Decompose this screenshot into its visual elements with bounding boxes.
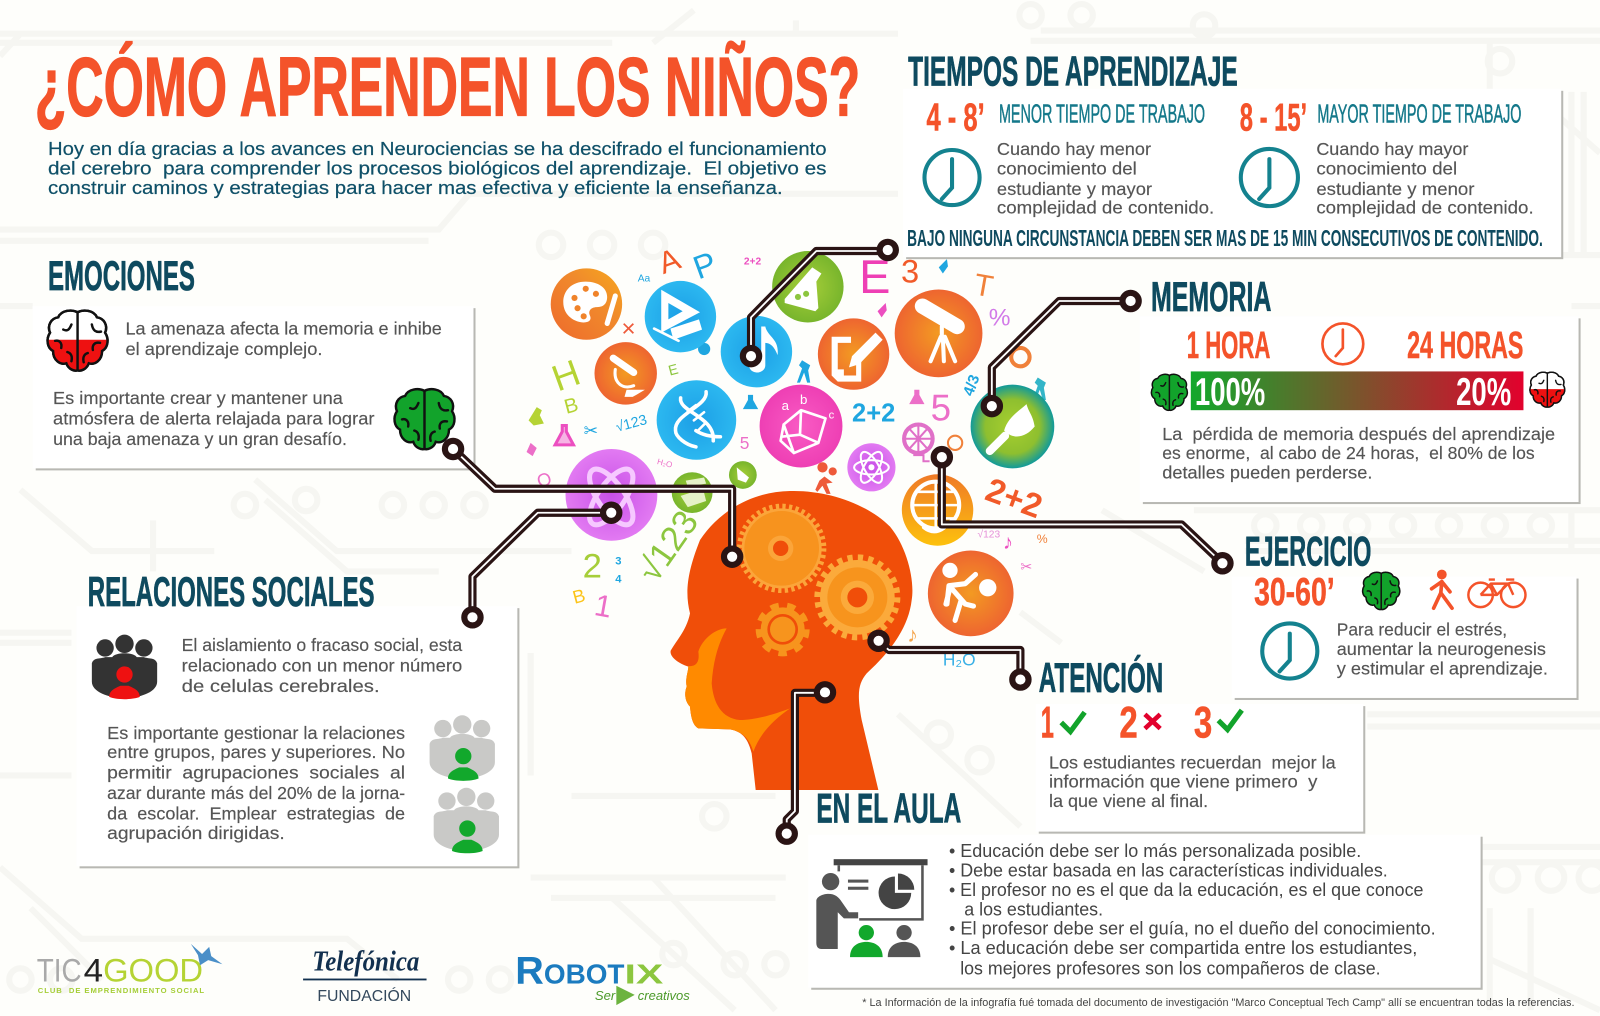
text: atmosfera: una baja amenaza y un gran desafío. <box>53 429 347 449</box>
connector: atencion <box>870 633 1029 688</box>
icon: grey group two <box>434 788 499 853</box>
panel: ejercicio <box>1232 527 1579 700</box>
face highlight <box>685 628 790 752</box>
text: gestionar: entre grupos, pares y superiores. No <box>107 742 405 762</box>
text: amenaza: La amenaza afecta la memoria e inhibe <box>126 319 442 339</box>
panel: tiempos de aprendizaje <box>903 48 1563 259</box>
list: recomendaciones: los mejores profesores son los compañeros de clase. <box>960 957 1381 978</box>
footnote: * La Información de la infografía fué tomada del documento de investigación "Marco Conceptual Tech Camp" allí se encuentran todas la referencias. <box>862 997 1574 1009</box>
text: aislamiento: relacionado con un menor número <box>182 655 462 675</box>
title: ¿CÓMO APRENDEN LOS NIÑOS? <box>35 39 860 133</box>
text: gestionar <box>107 723 405 843</box>
panel: relaciones sociales <box>77 568 519 868</box>
doodles: letters and numbers around the head: T <box>971 268 996 304</box>
doodles: letters and numbers around the head: 4 <box>615 574 622 586</box>
text: mayor: estudiante y menor <box>1316 179 1475 199</box>
icon: teal clock <box>1262 623 1317 679</box>
doodles: letters and numbers around the head: ✂ <box>584 421 598 441</box>
text: recuerdan: la que viene al final. <box>1049 791 1208 811</box>
icon: child with ball <box>928 550 1014 636</box>
small flasks <box>527 259 1046 494</box>
text: mayor <box>1316 139 1534 217</box>
doodles: letters and numbers around the head: Aa <box>638 274 651 285</box>
duration 4-8: 4 - 8’ <box>927 97 985 140</box>
icon: microscope <box>594 342 657 405</box>
text: gestionar: Es importante gestionar la relaciones <box>107 723 405 743</box>
doodles: letters and numbers around the head: E <box>859 251 890 303</box>
logo: tic4good: 4 <box>84 952 103 989</box>
doodles: letters and numbers around the head: √123 <box>631 504 706 589</box>
icon: clock right <box>1241 149 1298 206</box>
duration 8-15: 8 - 15’ <box>1240 97 1307 140</box>
number 2 with cross <box>1119 697 1160 748</box>
list: recomendaciones <box>949 840 1436 978</box>
icon: small atom <box>847 443 896 491</box>
connector: ejercicio <box>934 449 1231 571</box>
text: perdida de memoria: detalles pueden perderse. <box>1162 463 1372 483</box>
retention bar: 100% <box>1195 371 1265 414</box>
icon: dark group with red person <box>92 635 157 699</box>
label 1 hora: 1 HORA <box>1187 324 1270 366</box>
doodles: letters and numbers around the head: B <box>562 394 581 419</box>
text: mayor: complejidad de contenido. <box>1316 197 1534 217</box>
logo: robotix: R <box>515 950 544 993</box>
doodles: letters and numbers around the head: ♪ <box>1003 532 1013 554</box>
text: menor: Cuando hay menor <box>997 139 1151 159</box>
gear small <box>759 606 806 653</box>
heading: memoria: MEMORIA <box>1151 273 1271 320</box>
icon: red brain <box>48 311 108 371</box>
text: perdida de memoria <box>1162 424 1555 483</box>
text: aislamiento: El aislamiento o fracaso social, esta <box>182 635 463 655</box>
heading: emociones: EMOCIONES <box>48 252 195 299</box>
icon: cube: b <box>800 392 807 407</box>
intro text: del cerebro para comprender los procesos biológicos del aprendizaje. El objetivo es <box>48 157 827 178</box>
connector: relaciones <box>464 505 619 625</box>
panel: en el aula <box>808 835 1483 990</box>
icon: large atom <box>566 449 657 541</box>
text: amenaza: el aprendizaje complejo. <box>126 339 322 359</box>
label 24 horas: 24 HORAS <box>1407 324 1523 366</box>
doodles: letters and numbers around the head: H₂O <box>656 457 673 470</box>
heading: tiempos: TIEMPOS DE APRENDIZAJE <box>908 48 1238 95</box>
intro text <box>48 138 827 198</box>
list: recomendaciones: • El profesor debe ser el guía, no el dueño del conocimiento. <box>949 918 1436 939</box>
icon: cube: a <box>782 398 790 413</box>
icon: clock left <box>924 150 980 205</box>
text: atmosfera <box>53 388 375 449</box>
doodles: letters and numbers around the head: 5 <box>740 433 749 453</box>
icon: orange clock <box>1322 323 1363 364</box>
text: recuerdan: información que viene primero y <box>1049 772 1318 792</box>
doodles: letters and numbers around the head: × <box>621 316 636 343</box>
logo: robotix <box>515 950 690 1005</box>
list: recomendaciones: • El profesor no es el que da la educación, es el que conoce <box>949 879 1423 900</box>
icon: calculator <box>672 472 713 513</box>
number 1 with check: 1 <box>1041 697 1054 748</box>
logo: telefonica fundacion: Telefónica <box>312 946 419 977</box>
number 1 with check <box>1041 697 1085 748</box>
text: gestionar: agrupación dirigidas. <box>107 823 285 843</box>
text: aislamiento <box>182 635 463 696</box>
doodles: letters and numbers around the head: 2+2 <box>981 472 1047 526</box>
text: menor: conocimiento del <box>997 158 1137 178</box>
text: mayor: conocimiento del <box>1316 158 1457 178</box>
icon: teacher with board <box>816 859 928 957</box>
label menor tiempo: MENOR TIEMPO DE TRABAJO <box>999 100 1205 128</box>
doodles: letters and numbers around the head: 2+2 <box>744 256 761 267</box>
retention bar: 20% <box>1456 371 1511 414</box>
heading: en el aula: EN EL AULA <box>816 784 961 831</box>
text: para reducir: Para reducir el estrés, <box>1337 620 1507 640</box>
icon: ruler and pencil <box>645 281 716 352</box>
doodles: letters and numbers around the head: A <box>654 242 685 281</box>
connector: memoria <box>984 293 1139 414</box>
duration 30-60: 30-60’ <box>1254 571 1335 614</box>
doodles: letters and numbers around the head: 2+2 <box>852 399 895 427</box>
text: gestionar: permitir agrupaciones sociales al <box>107 763 405 783</box>
text: recuerdan <box>1049 752 1336 811</box>
text: para reducir: aumentar la neurogenesis <box>1337 639 1546 659</box>
icon: red brain <box>1530 372 1565 407</box>
icon: magnifier <box>971 385 1054 468</box>
text: atmosfera: atmósfera de alerta relajada para lograr <box>53 408 375 428</box>
doodles: letters and numbers around the head: O <box>534 467 554 492</box>
text: amenaza <box>126 319 442 359</box>
panel: emociones <box>33 252 476 470</box>
list: recomendaciones: • Educación debe ser lo más personalizada posible. <box>949 840 1361 861</box>
icon: green brain <box>394 389 454 449</box>
doodles: letters and numbers around the head: 3 <box>901 253 919 290</box>
text: para reducir <box>1337 620 1548 678</box>
text: recuerdan: Los estudiantes recuerdan mejor la <box>1049 752 1336 772</box>
text: aislamiento: de celulas cerebrales. <box>182 676 380 696</box>
doodles: letters and numbers around the head: √123 <box>978 529 1000 541</box>
icon: music note <box>721 316 792 387</box>
doodles: letters and numbers around the head: ✂ <box>1020 559 1032 575</box>
logo: telefonica fundacion: FUNDACIÓN <box>317 986 411 1005</box>
list: recomendaciones: a los estudiantes. <box>964 898 1103 919</box>
doodles: letters and numbers around the head: 1 <box>592 588 615 625</box>
doodles: letters and numbers around the head: √123 <box>614 412 649 436</box>
icon: palette <box>551 268 622 340</box>
icon: small flask circle <box>729 461 757 489</box>
logo: tic4good: CLUB DE EMPRENDIMIENTO SOCIAL <box>38 986 204 995</box>
doodles: letters and numbers around the head: E <box>667 362 680 379</box>
head with gears <box>671 491 912 790</box>
connector: emociones <box>445 441 740 565</box>
doodles: letters and numbers around the head: H <box>547 352 585 399</box>
list: recomendaciones: • Debe estar basada en las características individuales. <box>949 860 1388 881</box>
icon circles cluster <box>551 251 1054 636</box>
doodles: letters and numbers around the head: 3 <box>615 555 622 567</box>
doodles: letters and numbers around the head: ♪ <box>907 623 918 647</box>
icon: green brain <box>1363 572 1400 610</box>
retention bar <box>1191 371 1523 414</box>
doodles: letters and numbers around the head: B <box>570 584 587 608</box>
icon: telescope <box>895 289 982 377</box>
logo: robotix: Ser <box>595 988 616 1003</box>
text: gestionar: da escolar. Emplear estrategias de <box>107 803 405 823</box>
heading: relaciones: RELACIONES SOCIALES <box>88 568 374 615</box>
number 3 with check <box>1194 697 1242 748</box>
number 3 with check: 3 <box>1194 697 1212 748</box>
doodles: letters and numbers around the head: P <box>688 244 721 286</box>
text: atmosfera: Es importante crear y mantener una <box>53 388 343 408</box>
intro text: Hoy en día gracias a los avances en Neurociencias se ha descifrado el funcionamiento <box>48 138 827 159</box>
icon: pencil and note <box>818 318 889 390</box>
logo: robotix: creativos <box>638 988 690 1003</box>
text: mayor: Cuando hay mayor <box>1316 139 1469 159</box>
logo: robotix: OBOT <box>544 959 625 990</box>
gear medium <box>819 559 896 636</box>
text: gestionar: azar durante más del 20% de la jorna- <box>107 783 405 803</box>
number 2 with cross: 2 <box>1119 697 1138 748</box>
text: perdida de memoria: La pérdida de memoria después del aprendizaje <box>1162 424 1555 444</box>
icon: green brain <box>1151 374 1187 410</box>
icon: green flask <box>772 251 844 322</box>
logo: tic4good <box>37 944 222 995</box>
heading: atencion: ATENCIÓN <box>1039 653 1163 701</box>
icon: grey group one <box>430 715 495 781</box>
gear large <box>741 508 822 589</box>
list: recomendaciones: • La educación debe ser compartida entre los estudiantes, <box>949 937 1417 958</box>
panel: atencion <box>1036 653 1365 834</box>
icon: cube: c <box>829 409 835 421</box>
text: menor: complejidad de contenido. <box>997 197 1214 217</box>
intro text: construir caminos y estrategias para hacer mas efectiva y eficiente la enseñanza. <box>48 177 783 198</box>
heading: ejercicio: EJERCICIO <box>1245 527 1371 574</box>
logo: tic4good: GOOD <box>103 952 203 989</box>
icon: bicycle <box>1468 580 1525 607</box>
connector: tiempos <box>743 242 896 364</box>
text: menor: estudiante y mayor <box>997 179 1152 199</box>
icon: cube <box>760 385 842 467</box>
logo: telefonica fundacion <box>303 946 427 1005</box>
panel: memoria <box>1140 273 1581 504</box>
text: menor <box>997 139 1214 217</box>
icon: globe <box>902 474 973 546</box>
icon: walker <box>1432 571 1452 608</box>
doodles: letters and numbers around the head: % <box>1037 532 1048 546</box>
text: para reducir: y estimular el aprendizaje. <box>1337 658 1548 678</box>
icon: DNA <box>657 380 736 460</box>
doodles: letters and numbers around the head: 4/3 <box>960 373 983 398</box>
doodles: letters and numbers around the head: H₂O <box>943 649 976 669</box>
doodles: letters and numbers around the head: 2 <box>583 548 602 586</box>
connector: en el aula <box>779 684 833 842</box>
doodles: letters and numbers around the head: % <box>989 305 1011 332</box>
doodles: letters and numbers around the head: 5 <box>931 387 951 428</box>
logo: robotix: IX <box>624 959 664 990</box>
logo: tic4good: TIC <box>37 952 82 989</box>
text: perdida de memoria: es enorme, al cabo de 24 horas, el 80% de los <box>1162 443 1535 463</box>
doodles: letters and numbers around the head <box>527 242 1048 669</box>
